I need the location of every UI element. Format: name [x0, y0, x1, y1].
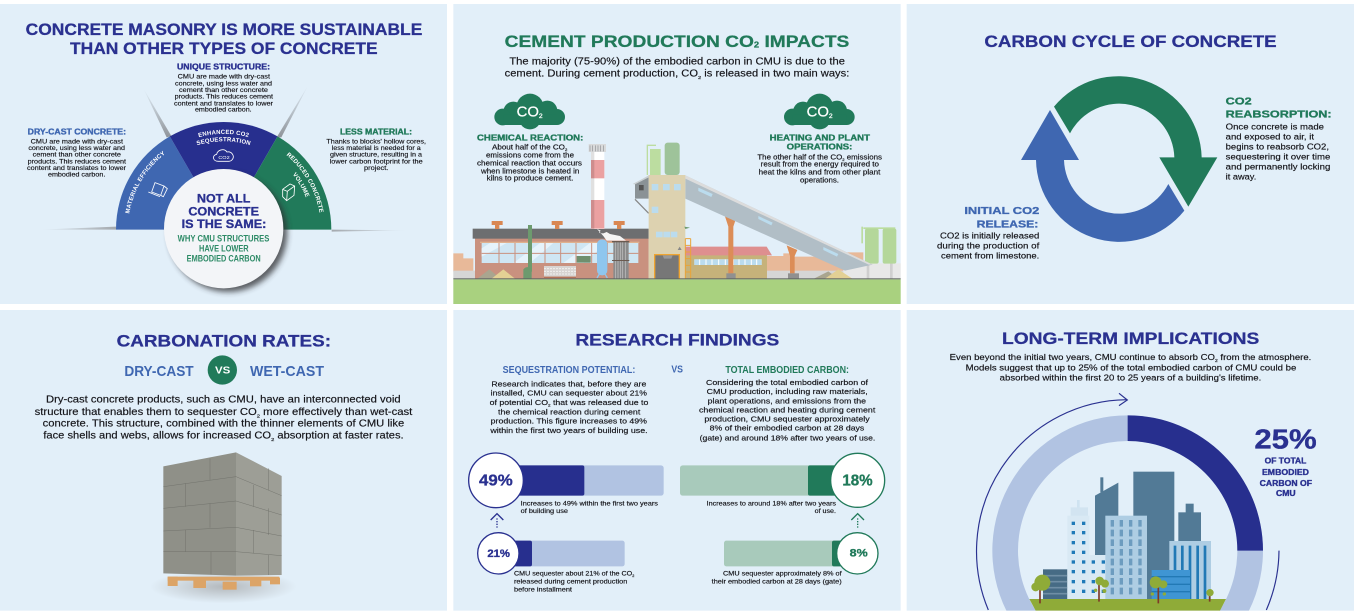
illustration: pallet of concrete blocks	[150, 452, 297, 603]
bar: 18%: 18%	[842, 472, 873, 489]
icon: material efficiency	[148, 183, 167, 197]
text block: sequestration: installed, CMU can sequester about 21%	[491, 389, 647, 398]
wedge labels	[125, 130, 324, 214]
text block: total embodied carbon: production, CMU sequester approximately	[704, 415, 870, 424]
wedge: reduced concrete volume	[224, 136, 331, 230]
caption: 21%: 2	[632, 574, 634, 578]
wet-cast label: WET-CAST	[250, 364, 324, 380]
text block: dry-cast concrete: products. This reduces cement	[28, 158, 126, 165]
title: 2	[754, 41, 760, 50]
text block: sequestration: that was released due to	[551, 398, 648, 407]
title: LONG-TERM IMPLICATIONS	[1002, 330, 1259, 348]
text block: less material	[326, 127, 426, 172]
arrow: reabsorption	[1054, 76, 1217, 207]
block stack	[544, 266, 576, 278]
text block: heating and plant operations: OPERATIONS:	[787, 143, 852, 152]
center circle: not all concrete is the same: NOT ALL	[197, 192, 250, 206]
intro text	[950, 352, 1311, 383]
body text: 2	[271, 437, 275, 443]
vs label: VS	[671, 364, 683, 375]
caption: 49%: Increases to 49% within the first two years	[521, 501, 658, 508]
text block: chemical reaction: 2	[565, 148, 567, 152]
blocks left face	[163, 452, 236, 576]
text block: unique structure: products. This reduces cement	[175, 94, 273, 101]
intro text: cement. During cement production, CO	[505, 69, 672, 80]
ground	[1029, 599, 1226, 611]
stat: 25% of total embodied carbon of CMU: OF TOTAL	[1265, 457, 1306, 466]
icon: CO2 cloud: CO2	[218, 155, 230, 161]
skyline	[453, 252, 863, 272]
text block: CO2 reabsorption	[1226, 97, 1332, 182]
intro text: Even beyond the initial two years, CMU continue to absorb CO	[950, 352, 1181, 362]
text block: sequestration: the chemical reaction during cement	[498, 408, 641, 417]
stat: 25% of total embodied carbon of CMU	[1254, 423, 1317, 498]
text block: CO2 reabsorption: Once concrete is made	[1226, 122, 1324, 132]
icon: CO2 cloud	[213, 150, 233, 161]
text block: less material: given structure, resulting in a	[330, 152, 422, 159]
title: IMPACTS	[759, 33, 849, 51]
arrow: initial release	[1021, 110, 1184, 242]
text block: unique structure: UNIQUE STRUCTURE:	[177, 63, 270, 72]
silos on tower	[647, 143, 680, 175]
text block: CO2 reabsorption: begins to reabsorb CO2,	[1226, 142, 1329, 152]
text block: total embodied carbon: chemical reaction and heating during cement	[699, 406, 876, 415]
text block: heating and plant operations: emissions	[845, 154, 883, 161]
caption: 21%	[514, 571, 634, 594]
text block: heating and plant operations	[757, 134, 883, 185]
center circle: not all concrete is the same	[164, 169, 283, 288]
wedge: enhanced CO2 sequestration	[170, 122, 277, 230]
caption: 21%: before installment	[514, 587, 572, 594]
body text: Dry-cast concrete products, such as CMU, have an interconnected void	[46, 395, 401, 406]
text block: less material: Thanks to blocks' hollow cores,	[326, 139, 426, 146]
material piles	[477, 269, 852, 279]
text block: sequestration: within the first two years of building use.	[489, 426, 648, 435]
text block: dry-cast concrete: cement than other concrete	[33, 152, 121, 159]
text block: unique structure: content and translates to lower	[174, 101, 274, 108]
title: CONCRETE MASONRY IS MORE SUSTAINABLE	[26, 21, 422, 39]
text block: CO2 reabsorption: CO2	[1226, 97, 1252, 108]
body text: concrete. This structure, combined with the thinner elements of CMU like	[43, 419, 404, 430]
wedge labels: ENHANCED CO2	[198, 130, 249, 138]
text block: sequestration: of potential CO	[490, 398, 541, 407]
caption: 18%	[707, 501, 836, 515]
text block: sequestration: production. This figure increases to 49%	[491, 417, 647, 426]
body text	[35, 395, 413, 443]
heading: total embodied carbon: TOTAL EMBODIED CARBON:	[725, 365, 849, 376]
text block: unique structure: CMU are made with dry-cast	[178, 74, 270, 81]
caption: 21%: released during cement production	[514, 579, 628, 586]
text block: CO2 reabsorption: REABSORPTION:	[1226, 110, 1332, 121]
title: CARBONATION RATES:	[117, 333, 331, 351]
vs badge: VS	[215, 365, 231, 376]
text block: initial CO2 release: CO2 is initially released	[940, 231, 1040, 241]
low dark building	[1043, 569, 1067, 599]
title: RESEARCH FINDINGS	[575, 332, 779, 350]
wedge: material efficiency	[116, 136, 224, 230]
conveyor	[685, 175, 873, 271]
text block: heating and plant operations: operations.	[800, 178, 839, 185]
low building	[685, 247, 772, 279]
bar: 8%	[724, 533, 878, 574]
bar: 49%: 49%	[479, 472, 513, 489]
text block: dry-cast concrete: embodied carbon.	[48, 172, 105, 179]
caption: 8%: CMU sequester approximately 8% of	[723, 571, 842, 578]
text block: chemical reaction	[477, 134, 583, 183]
text block: dry-cast concrete	[27, 127, 127, 179]
right striped building	[1169, 541, 1211, 599]
body text: absorption at faster rates.	[274, 431, 404, 442]
text block: chemical reaction: About half of the CO	[492, 144, 555, 151]
text block: chemical reaction: chemical reaction that occurs	[477, 161, 583, 168]
stat: 25% of total embodied carbon of CMU: CARBON OF	[1260, 479, 1312, 488]
wedge labels: SEQUESTRATION	[196, 137, 251, 146]
caption: 21%: CMU sequester about 21% of the CO	[514, 571, 619, 578]
text block: dry-cast concrete: DRY-CAST CONCRETE:	[28, 127, 126, 136]
arrow: 8% to 18%	[851, 514, 864, 529]
icon: CO2 cloud left	[494, 94, 565, 129]
stat: 25% of total embodied carbon of CMU: EMBODIED	[1262, 468, 1309, 477]
icon: CO2 cloud left: 2	[539, 113, 543, 120]
text block: sequestration: 2	[548, 403, 551, 408]
blue low building	[1152, 570, 1190, 599]
panel: carbon cycle of concrete	[907, 4, 1354, 304]
panel: carbonation rates	[0, 310, 447, 611]
wedge labels: MATERIAL EFFICIENCY	[125, 150, 164, 214]
text block: CO2 reabsorption: and permanently locking	[1226, 162, 1331, 172]
body text: structure that enables them to sequester CO	[35, 407, 225, 418]
factory illustration	[453, 143, 901, 304]
stat: 25% of total embodied carbon of CMU: 25%	[1254, 423, 1317, 454]
text block: less material: project.	[364, 165, 388, 172]
icon: CO2 cloud right	[784, 94, 855, 129]
body text: face shells and webs, allows for increased CO	[43, 431, 241, 442]
panel: research findings	[453, 310, 901, 611]
text block: less material: lower carbon footprint for the	[330, 158, 423, 165]
ladder	[685, 239, 691, 279]
caption: 8%	[712, 571, 842, 586]
tower	[633, 175, 690, 279]
text block: heating and plant operations: heat the kilns and from other plant	[759, 170, 880, 177]
text block: sequestration	[489, 380, 648, 435]
bar: 21%	[478, 533, 625, 574]
intro text: The majority (75-90%) of the embodied carbon in CMU is due to the	[509, 56, 845, 67]
text block: total embodied carbon	[699, 378, 876, 443]
icon: concrete block	[283, 184, 295, 201]
text block: heating and plant operations: HEATING AND PLANT	[770, 134, 870, 143]
text block: initial CO2 release: INITIAL CO2	[964, 206, 1040, 217]
text block: unique structure	[174, 63, 274, 114]
text block: unique structure: cement than other concrete	[179, 87, 268, 94]
chimney	[589, 144, 606, 229]
text block: unique structure: embodied carbon.	[195, 107, 252, 114]
dark towers	[1095, 472, 1201, 600]
text block: total embodied carbon: CMU production, including raw materials,	[707, 387, 868, 396]
text block: total embodied carbon: (gate) and around 18% after two years of use.	[700, 434, 875, 443]
text block: initial CO2 release: RELEASE:	[977, 220, 1038, 231]
bar: 8%: 8%	[850, 548, 868, 560]
wedge labels: REDUCED CONCRETE	[286, 152, 324, 213]
text block: CO2 reabsorption: it away.	[1226, 172, 1256, 182]
text block: chemical reaction: when limestone is heated in	[480, 168, 579, 175]
text block: chemical reaction: CHEMICAL REACTION:	[477, 134, 583, 143]
text block: total embodied carbon: Considering the total embodied carbon of	[706, 378, 869, 387]
title	[26, 21, 422, 58]
text block: CO2 reabsorption: and exposed to air, it	[1226, 132, 1315, 142]
ground	[453, 279, 901, 304]
center circle: not all concrete is the same: IS THE SAME:	[182, 217, 266, 231]
mid blue building	[1105, 516, 1147, 599]
caption: 49%: of building use	[521, 508, 569, 515]
conveyor supports	[725, 215, 799, 279]
body text: 2	[257, 413, 260, 419]
text block: total embodied carbon: plant operations, and emissions from the	[708, 397, 866, 406]
intro text: from the atmosphere.	[1218, 352, 1311, 362]
title: THAN OTHER TYPES OF CONCRETE	[70, 40, 378, 58]
icon: CO2 cloud right: CO	[807, 105, 829, 121]
text block: sequestration: Research indicates that, before they are	[491, 380, 646, 389]
pipe and machinery	[523, 225, 532, 279]
text block: initial CO2 release: during the production of	[937, 241, 1040, 251]
text block: chemical reaction: emissions come from the	[486, 152, 574, 159]
title: CARBON CYCLE OF CONCRETE	[984, 33, 1277, 51]
bar: 18%	[680, 453, 885, 507]
bar: 21%: 21%	[487, 548, 510, 560]
text block: chemical reaction: kilns to produce cement.	[487, 176, 573, 183]
intro text: 2	[1215, 358, 1218, 363]
center circle: not all concrete is the same: WHY CMU STRUCTURES	[178, 233, 269, 243]
blue tank	[597, 239, 607, 278]
pallet	[168, 577, 280, 590]
intro text: 2	[698, 75, 701, 81]
main building	[473, 221, 649, 279]
text block: heating and plant operations: The other half of the CO	[757, 154, 832, 161]
panel: long-term implications	[907, 310, 1354, 611]
text block: less material: less material is needed for a	[332, 145, 421, 152]
center circle: not all concrete is the same: CONCRETE	[188, 204, 259, 218]
intro text: Models suggest that up to 25% of the total embodied carbon of CMU could be	[966, 363, 1297, 373]
intro text: is released in two main ways:	[701, 69, 849, 80]
icon: CO2 cloud left: CO	[517, 105, 539, 121]
bar: 49%	[469, 453, 664, 508]
caption: 49%	[521, 501, 658, 515]
text block: less material: LESS MATERIAL:	[340, 127, 412, 136]
text block: CO2 reabsorption: sequestering it over time	[1226, 152, 1331, 162]
semicircle diagram	[116, 122, 332, 230]
text block: dry-cast concrete: CMU are made with dry-cast	[31, 139, 123, 146]
illustration: city skyline	[1029, 472, 1226, 611]
trees	[1031, 575, 1214, 603]
stat: 25% of total embodied carbon of CMU: CMU	[1276, 489, 1296, 498]
intro text: absorbed within the first 20 to 25 years of a building's lifetime.	[1000, 373, 1261, 383]
text block: dry-cast concrete: content and translates to lower	[27, 165, 127, 172]
text block: unique structure: concrete, using less water and	[175, 81, 272, 88]
shadow spikes	[40, 85, 408, 232]
blocks right face	[236, 452, 282, 576]
title: CEMENT PRODUCTION CO	[505, 33, 717, 51]
wedge labels: VOLUME	[294, 172, 310, 198]
text block: total embodied carbon: 8% of their embodied carbon at 28 days	[710, 424, 865, 433]
right silos	[861, 227, 896, 264]
body text: more effectively than wet-cast	[260, 407, 413, 418]
caption: 8%: their embodied carbon at 28 days (gate)	[712, 579, 842, 586]
text block: dry-cast concrete: concrete, using less water and	[28, 145, 125, 152]
caption: 18%: of use.	[815, 508, 836, 515]
arrow: 21% to 49%	[491, 514, 503, 529]
center circle: not all concrete is the same: HAVE LOWER	[199, 244, 249, 254]
circular arrow	[977, 393, 1279, 610]
caption: 18%: Increases to around 18% after two years	[707, 501, 836, 508]
panel: concrete masonry is more sustainable	[0, 4, 447, 304]
donut chart: 25 percent	[992, 415, 1263, 611]
panel: cement production CO2 impacts	[453, 4, 901, 304]
center circle: not all concrete is the same: EMBODIED CARBON	[187, 254, 261, 264]
text block: heating and plant operations: 2	[842, 158, 845, 162]
cooler and smoke	[597, 229, 629, 279]
text block: heating and plant operations: result from the energy required to	[761, 162, 879, 169]
icon: CO2 cloud right: 2	[829, 113, 833, 120]
vs badge	[208, 355, 237, 385]
white building	[1067, 500, 1106, 599]
text block: initial CO2 release	[937, 206, 1040, 261]
center circle shadow	[169, 173, 287, 292]
dry-cast label: DRY-CAST	[124, 364, 194, 380]
intro text	[505, 56, 849, 81]
heading: sequestration potential: SEQUESTRATION POTENTIAL:	[503, 365, 635, 376]
text block: initial CO2 release: cement from limestone.	[941, 251, 1039, 261]
